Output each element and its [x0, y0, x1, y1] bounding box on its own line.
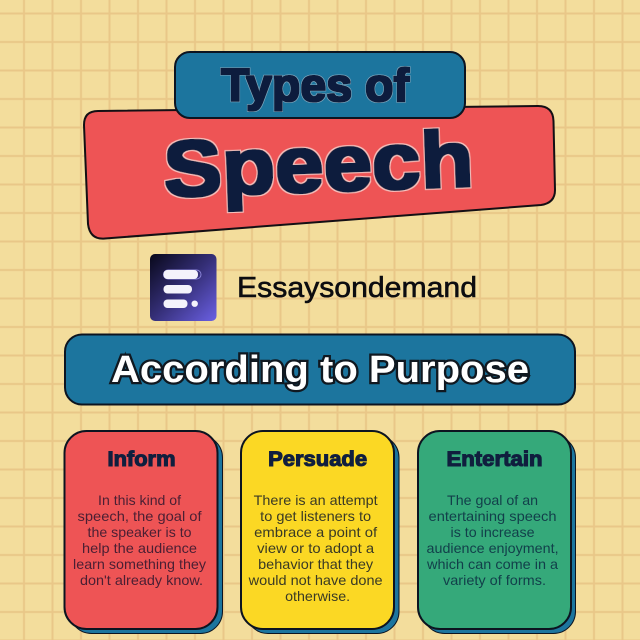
title block: [84, 52, 555, 239]
card text: Persuade: to get listeners to: [260, 508, 371, 524]
card heading: Persuade: Persuade: [268, 448, 367, 471]
card text: Persuade: embrace a point of: [254, 524, 377, 540]
heading: Speech: Speech: [162, 114, 475, 213]
card text: Entertain: entertaining speech: [429, 508, 557, 524]
heading: Types of: Types of: [221, 59, 410, 111]
title panel: blue: [175, 52, 465, 118]
brand logo and name: [150, 254, 477, 321]
card text: Inform: don't already know.: [80, 572, 203, 588]
card heading: Inform: Inform: [108, 448, 176, 471]
icon: Essaysondemand logo: [150, 254, 216, 321]
card text: Inform: speech, the goal of: [78, 508, 202, 524]
section banner: [65, 334, 575, 404]
card text: Inform: help the audience: [82, 540, 197, 556]
title panel: red tilted: [84, 106, 555, 239]
card text: Persuade: otherwise.: [285, 588, 350, 604]
card text: Persuade: view or to adopt a: [257, 540, 374, 556]
card text: Entertain: audience enjoyment,: [427, 540, 559, 556]
card: Persuade: [241, 431, 399, 634]
card text: Entertain: is to increase: [451, 524, 535, 540]
card text: Persuade: would not have done: [248, 572, 383, 588]
brand name: Essaysondemand: [237, 272, 477, 304]
card text: Entertain: The goal of an: [447, 492, 538, 508]
card: Inform: [64, 431, 222, 634]
card text: Inform: learn something they: [73, 556, 206, 572]
card text: Persuade: There is an attempt: [254, 492, 378, 508]
card text: Inform: the speaker is to: [88, 524, 192, 540]
card text: Persuade: behavior that they: [258, 556, 373, 572]
banner heading: According to Purpose: [111, 349, 529, 391]
card text: Entertain: which can come in a: [426, 556, 558, 572]
card: Entertain: [418, 431, 576, 634]
card text: Inform: In this kind of: [98, 492, 181, 508]
card heading: Entertain: Entertain: [446, 448, 542, 471]
card text: Entertain: variety of forms.: [443, 572, 546, 588]
